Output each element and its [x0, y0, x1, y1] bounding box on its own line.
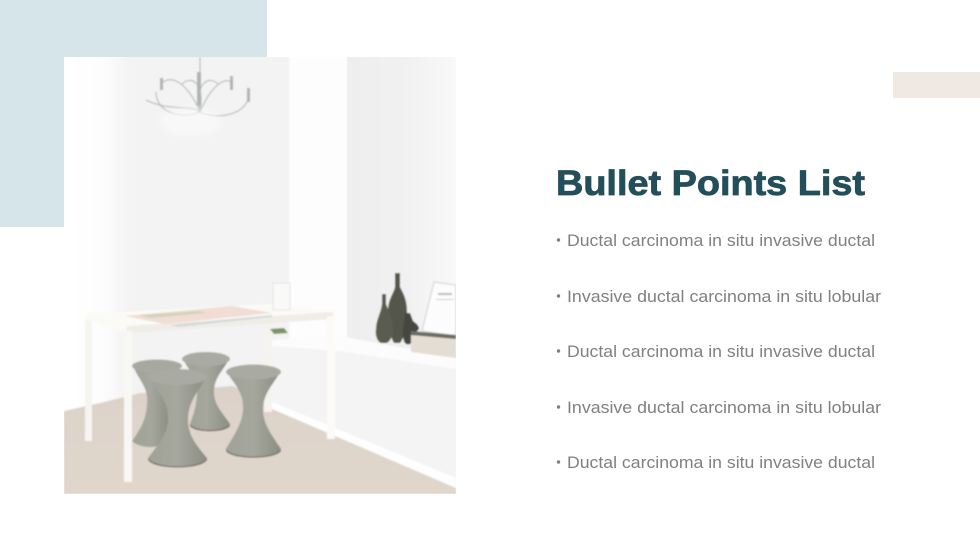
bullet list	[557, 231, 881, 472]
decorative blue block	[0, 0, 267, 227]
right wall	[347, 50, 460, 350]
box with books	[411, 335, 456, 358]
bullet item 5: Ductal carcinoma in situ invasive ductal	[567, 453, 875, 472]
picture frame	[422, 282, 456, 336]
bullet item 4: Invasive ductal carcinoma in situ lobular	[567, 398, 881, 417]
plant leaf	[270, 328, 288, 334]
bullet item 3: Ductal carcinoma in situ invasive ductal	[567, 342, 875, 361]
glass	[273, 283, 290, 310]
table runner	[125, 306, 272, 324]
table leg front right	[327, 316, 335, 439]
bench	[272, 340, 456, 487]
chandelier	[146, 57, 249, 116]
pillar	[289, 50, 347, 350]
table leg back right	[264, 403, 272, 412]
bullet item 1: Ductal carcinoma in situ invasive ductal	[567, 231, 875, 250]
stool front	[148, 369, 207, 468]
stool back left	[132, 360, 182, 447]
table leg back left	[85, 320, 92, 441]
stool back	[182, 352, 230, 431]
table leg front left	[124, 331, 132, 482]
vases	[376, 273, 419, 344]
bullet item 2: Invasive ductal carcinoma in situ lobular	[567, 287, 881, 306]
title: Bullet Points List	[556, 164, 865, 203]
curtain	[64, 57, 108, 411]
floor	[64, 386, 456, 494]
decorative beige tab	[893, 72, 980, 98]
stool right	[226, 364, 281, 458]
table top	[141, 310, 274, 314]
wall	[130, 57, 289, 394]
photo: white dining room with stools	[60, 50, 460, 500]
